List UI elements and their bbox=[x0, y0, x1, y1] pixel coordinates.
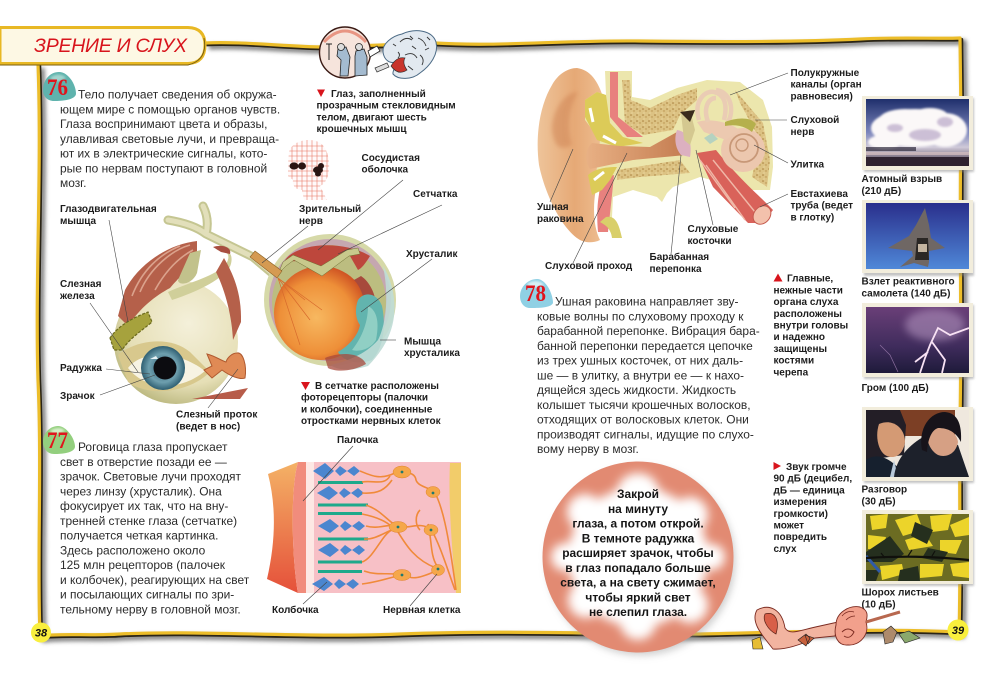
text block 76: Глаза воспринимают цвета и образы, bbox=[60, 117, 267, 131]
label group: ear: перепонка bbox=[650, 264, 702, 275]
label group: ear: нерв bbox=[790, 127, 814, 138]
marker triangle bbox=[774, 462, 781, 470]
text block 78: Ушная раковина направляет зву- bbox=[555, 294, 738, 308]
label group: eye: Сетчатка bbox=[413, 189, 458, 200]
orange layer bbox=[267, 462, 298, 593]
label group: ear: Слуховые bbox=[688, 224, 739, 235]
label group: eye: Сосудистая bbox=[362, 153, 420, 164]
note: inner ear protected: защищены bbox=[774, 344, 827, 355]
text block 77: и посылающих сигналы по зри- bbox=[60, 588, 234, 602]
diagram: eye cross-section bbox=[250, 234, 396, 371]
text block 78: вому нерву в мозг. bbox=[537, 442, 639, 456]
photo: conversation bbox=[862, 407, 974, 483]
red membrane bbox=[293, 462, 310, 593]
callout text: расширяет зрачок, чтобы bbox=[562, 546, 714, 560]
note: loud sound: Звук громче bbox=[786, 462, 847, 473]
text block 78: из трех ушных косточек, от них даль- bbox=[537, 354, 743, 368]
caption: jet bbox=[862, 277, 955, 300]
callout text: в глаз попадало больше bbox=[565, 561, 711, 575]
label group: eye: железа bbox=[59, 291, 95, 302]
label group: eye: Слезная bbox=[60, 279, 102, 290]
callout text: Закрой bbox=[617, 487, 659, 501]
note: loud sound bbox=[774, 462, 852, 555]
heart-shaped retina fold bbox=[283, 245, 370, 272]
cornea bbox=[330, 266, 395, 370]
caption: leaves bbox=[862, 588, 939, 610]
photo: jet bbox=[862, 200, 974, 276]
page number 38: 38 bbox=[35, 628, 48, 640]
note: eye muscles: телом, двигают шесть bbox=[316, 112, 427, 123]
icon: wireframe head bbox=[288, 140, 330, 200]
text block 77: Здесь расположено около bbox=[60, 543, 206, 557]
pink tissue bbox=[298, 462, 461, 593]
note: inner ear protected: и надежно bbox=[774, 332, 825, 343]
label group: ear: труба (ведет bbox=[790, 200, 853, 212]
label group: ear: Евстахиева bbox=[790, 189, 848, 200]
label group: ear: раковина bbox=[537, 214, 584, 225]
caption: thunder: Гром (100 дБ) bbox=[862, 383, 929, 394]
label group: ear: Полукружные bbox=[790, 68, 860, 79]
note: retina: отростками нервных клеток bbox=[301, 416, 442, 427]
text block 77: 125 млн рецепторов (палочек bbox=[60, 558, 226, 572]
text block 78: барабанной перепонке. Вибрация бара- bbox=[537, 324, 760, 338]
marker triangle bbox=[317, 90, 325, 97]
rods bbox=[318, 482, 368, 572]
text block 78: отходящих от волосковых клеток. Они bbox=[537, 413, 749, 427]
tear duct bbox=[204, 353, 246, 379]
label group: ear: равновесия) bbox=[790, 91, 853, 102]
label group: retina: Нервная клетка bbox=[383, 605, 461, 616]
text block 76: рые по нервам поступают в головной bbox=[60, 161, 267, 175]
text block 78: банной перепонки передается цепочке bbox=[537, 339, 753, 353]
text block 78: производят сигналы, идущие по слухо- bbox=[537, 427, 754, 441]
label group: eye: Слезный проток bbox=[176, 410, 258, 421]
note: eye muscles bbox=[316, 89, 456, 135]
cones bbox=[312, 463, 365, 591]
text block 77: получается четкая картинка. bbox=[60, 529, 218, 543]
label group: ear: каналы (орган bbox=[790, 80, 862, 91]
eustachian tube bbox=[697, 150, 773, 223]
diagram: retina cells bbox=[267, 462, 461, 593]
auditory nerve bbox=[725, 118, 756, 132]
text block 77: Роговица глаза пропускает bbox=[78, 440, 228, 454]
label group: eye: Глазодвигательная bbox=[60, 204, 157, 215]
photo: lightning bbox=[862, 303, 974, 379]
note: retina: и колбочки), соединенные bbox=[301, 403, 433, 415]
cartoon: eye sends picture to brain bbox=[320, 27, 437, 78]
text block 76: ющем мире с помощью органов чувств. bbox=[60, 102, 280, 116]
note: retina bbox=[301, 381, 442, 427]
callout text: чтобы яркий свет bbox=[585, 590, 691, 604]
note: eye muscles: прозрачным стекловидным bbox=[316, 101, 456, 112]
text block 77: зрачок. Световые лучи проходят bbox=[60, 470, 242, 484]
note: eye muscles: Глаз, заполненный bbox=[331, 89, 426, 100]
text block 78: ковые волны по слуховому проходу к bbox=[537, 309, 744, 323]
label group: ear: Ушная bbox=[537, 202, 569, 213]
cochlea bbox=[721, 128, 765, 172]
diagram: ear anatomy bbox=[538, 68, 775, 242]
label group: eye: (ведет в нос) bbox=[176, 421, 240, 432]
optic nerve Y bbox=[168, 206, 278, 278]
text block 77: тренней стенке глаза (сетчатке) bbox=[60, 514, 237, 528]
tendon bbox=[168, 249, 232, 300]
note: retina: фоторецепторы (палочки bbox=[301, 392, 428, 404]
label group: eye: хрусталика bbox=[404, 348, 460, 359]
callout text: на минуту bbox=[608, 502, 668, 516]
caption: conversation: Разговор bbox=[862, 485, 907, 496]
callout text: глаза, а потом открой. bbox=[572, 517, 704, 531]
text block 77 bbox=[60, 440, 250, 616]
page number 38 bbox=[31, 622, 51, 642]
photo: leaves bbox=[862, 510, 974, 586]
caption: nuclear explosion: Атомный взрыв bbox=[862, 174, 942, 185]
title banner bbox=[0, 28, 205, 65]
photo: nuclear explosion bbox=[862, 96, 974, 172]
note: inner ear protected: костями bbox=[774, 356, 814, 367]
nerve core bbox=[250, 251, 282, 278]
text block 76: улавливая световые лучи, и превраща- bbox=[60, 132, 279, 146]
text block 78: ше — в улитку, а внутри ее — к нахо- bbox=[537, 368, 744, 382]
title: ЗРЕНИЕ И СЛУХ bbox=[34, 35, 188, 57]
eyeball bbox=[114, 280, 238, 404]
cartoon: ear with tiny people bbox=[752, 607, 920, 649]
text block 77: свет в отверстие позади ее — bbox=[60, 455, 227, 469]
caption: leaves: Шорох листьев bbox=[862, 588, 939, 599]
note: inner ear protected: черепа bbox=[774, 367, 809, 378]
ear flap bbox=[600, 217, 622, 238]
caption: conversation: (30 дБ) bbox=[862, 496, 896, 508]
page number 39: 39 bbox=[952, 625, 965, 637]
label group: eye: Радужка bbox=[60, 363, 102, 374]
label group: retina bbox=[272, 435, 461, 616]
label group: eye: Зрачок bbox=[60, 391, 96, 402]
red lining bbox=[610, 72, 643, 137]
label group: ear: Слуховой bbox=[790, 115, 839, 126]
text block 76: ют их в электрические сигналы, кото- bbox=[60, 147, 267, 161]
caption: nuclear explosion bbox=[862, 174, 942, 197]
badge 78 bbox=[520, 279, 553, 308]
callout text: В темноте радужка bbox=[582, 531, 695, 545]
yellow strip bbox=[449, 463, 461, 593]
note: eye muscles: крошечных мышц bbox=[316, 124, 407, 135]
badge 76: 76 bbox=[47, 75, 68, 100]
label group: eye: Зрительный bbox=[299, 204, 361, 215]
marker triangle bbox=[774, 274, 782, 282]
pinna bbox=[538, 68, 612, 242]
right muscle bbox=[216, 258, 241, 340]
badge 77 bbox=[43, 426, 75, 454]
note: inner ear protected: расположены bbox=[774, 309, 842, 320]
caption: leaves: (10 дБ) bbox=[862, 600, 896, 610]
callout text: не слепил глаза. bbox=[589, 605, 687, 619]
man bbox=[866, 410, 906, 460]
note: loud sound: дБ — единица bbox=[774, 485, 845, 496]
label group: eye bbox=[59, 153, 460, 432]
label group: eye: оболочка bbox=[362, 164, 409, 176]
bone mass bbox=[585, 71, 773, 238]
note: inner ear protected bbox=[774, 274, 848, 378]
badge 77: 77 bbox=[47, 428, 68, 453]
eyelids bbox=[118, 341, 210, 391]
badge 78: 78 bbox=[525, 281, 546, 306]
text block 77: фокусирует их так, что на вну- bbox=[60, 499, 228, 513]
label group: retina: Колбочка bbox=[272, 604, 319, 616]
lacrimal gland bbox=[110, 312, 152, 350]
note: inner ear protected: нежные части bbox=[774, 285, 843, 296]
ossicles bbox=[681, 110, 695, 145]
spongy bone bbox=[622, 80, 697, 135]
label group: retina: Палочка bbox=[337, 435, 379, 446]
label group: eye: Хрусталик bbox=[406, 249, 458, 260]
note: loud sound: 90 дБ (децибел, bbox=[774, 473, 852, 485]
semicircular canals bbox=[697, 90, 731, 122]
caption: jet: Взлет реактивного bbox=[862, 277, 955, 288]
label group: ear: Слуховой проход bbox=[545, 261, 633, 272]
diagram: eyeball with muscles bbox=[110, 206, 278, 404]
note: inner ear protected: органа слуха bbox=[774, 297, 839, 308]
text block 76 bbox=[60, 88, 280, 190]
callout text: света, а на свету сжимает, bbox=[560, 576, 716, 590]
yellow cartilage bbox=[585, 92, 643, 147]
comb bbox=[306, 462, 314, 593]
text block 76: мозг. bbox=[60, 176, 86, 190]
text block 78: колышет тысячи крошечных волосков, bbox=[537, 398, 751, 412]
note: loud sound: может bbox=[774, 520, 804, 532]
caption: jet: самолета (140 дБ) bbox=[862, 288, 950, 300]
note: retina: В сетчатке расположены bbox=[315, 381, 439, 392]
muscles bbox=[118, 241, 197, 326]
lens bbox=[338, 294, 384, 362]
page number 39 bbox=[948, 620, 968, 640]
text block 76: Тело получает сведения об окружа- bbox=[78, 88, 277, 102]
note: inner ear protected: Главные, bbox=[787, 274, 833, 285]
label group: ear: в глотку) bbox=[790, 212, 834, 223]
text block 77: и колбочек), реагирующих на свет bbox=[60, 573, 250, 587]
note: inner ear protected: внутри головы bbox=[774, 320, 848, 332]
leader lines: retina bbox=[303, 446, 437, 606]
callout: fun experiment circle bbox=[542, 462, 735, 655]
ear canal bbox=[586, 132, 686, 169]
label group: ear: Улитка bbox=[790, 160, 824, 171]
text block 77: тельному нерву в головной мозг. bbox=[60, 602, 241, 616]
label group: ear: косточки bbox=[688, 236, 732, 247]
nerve cell bodies and axons bbox=[360, 471, 456, 590]
label group: eye: мышца bbox=[60, 216, 97, 227]
ciliary muscle bbox=[354, 276, 376, 310]
caption: nuclear explosion: (210 дБ) bbox=[862, 186, 901, 197]
woman bbox=[894, 436, 969, 477]
note: loud sound: слух bbox=[774, 544, 797, 555]
callout text bbox=[560, 487, 716, 619]
text block 77: через линзу (хрусталик). Она bbox=[60, 484, 222, 498]
text block 78: дящейся здесь жидкости. Жидкость bbox=[537, 383, 736, 397]
note: loud sound: измерения bbox=[774, 497, 827, 508]
note: loud sound: повредить bbox=[774, 532, 827, 543]
label group: ear: Барабанная bbox=[650, 251, 709, 263]
caption: conversation bbox=[862, 485, 907, 508]
leader lines: ear bbox=[550, 73, 788, 263]
marker triangle bbox=[301, 382, 310, 390]
leader lines: eye bbox=[90, 180, 442, 408]
label group: eye: Мышца bbox=[404, 336, 441, 348]
eardrum bbox=[675, 130, 691, 157]
text block 78 bbox=[537, 294, 760, 456]
label group: eye: нерв bbox=[299, 216, 323, 227]
optic stub bbox=[178, 250, 201, 284]
badge 76 bbox=[43, 72, 76, 101]
note: loud sound: громкости) bbox=[774, 509, 828, 520]
label group: ear bbox=[537, 68, 862, 275]
